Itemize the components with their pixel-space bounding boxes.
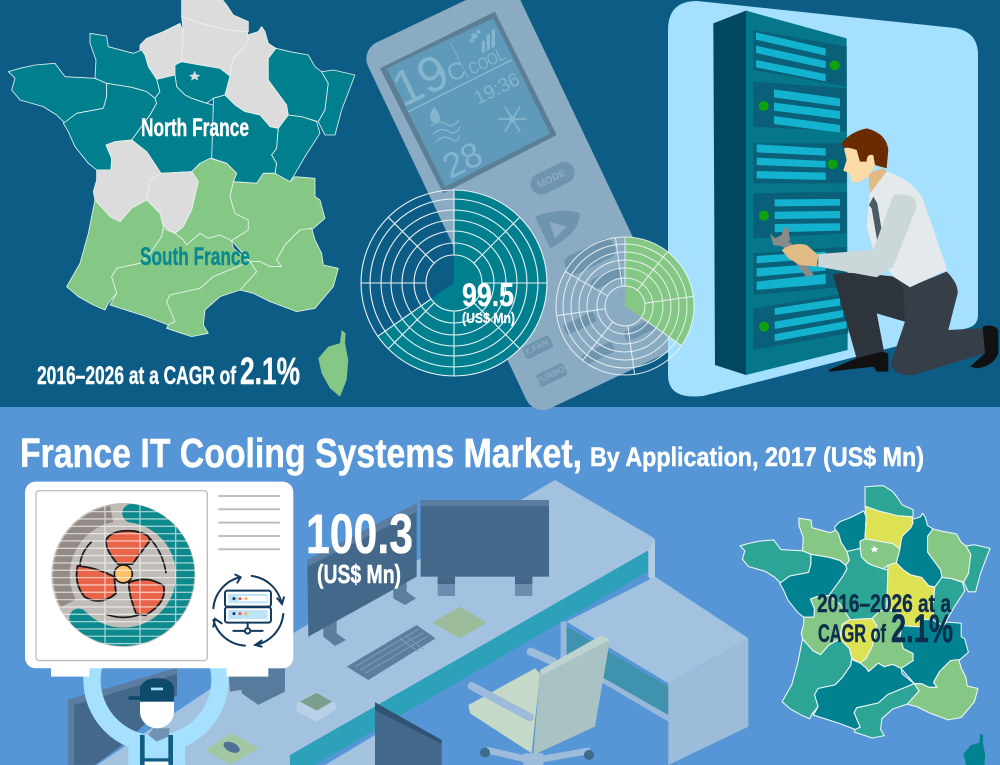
text: CAGR top: 2016–2026 at a CAGR of xyxy=(37,362,236,390)
map: France regional map xyxy=(740,486,990,765)
value: 99.5: 99.5 xyxy=(462,277,514,313)
map: France north and south regions xyxy=(8,0,355,397)
illustration: air conditioner remote control: COOL xyxy=(465,45,508,79)
illustration: air conditioner remote control: MODE xyxy=(536,168,568,191)
text: CAGR bottom: 2016–2026 at a xyxy=(817,590,952,618)
illustration: air conditioner remote control: 19:36 xyxy=(471,69,524,109)
value: 99.5: (US$ Mn) xyxy=(462,310,515,327)
panel: bottom blue background xyxy=(0,407,1000,765)
chart: large polar chart 99.5 xyxy=(361,190,547,376)
illustration: air conditioner remote control: °C xyxy=(434,56,470,92)
small box xyxy=(297,692,336,722)
title: By Application, 2017 (US$ Mn) xyxy=(590,442,924,472)
panel: light blue server background xyxy=(668,1,978,397)
illustration: air conditioner remote control: TURBO xyxy=(534,364,567,386)
illustration: air conditioner remote control xyxy=(360,0,684,416)
panel: top dark blue background xyxy=(0,0,1000,407)
title: France IT Cooling Systems Market, xyxy=(20,430,582,476)
vent lines xyxy=(218,496,280,549)
laptop xyxy=(375,702,442,765)
monitor: angled xyxy=(307,503,417,646)
illustration: left workstation and mousepad xyxy=(68,668,285,765)
icon: server with circular arrows xyxy=(213,575,284,647)
icon: fan xyxy=(50,500,197,650)
office chair xyxy=(468,635,610,765)
keyboard xyxy=(347,625,436,680)
text: CAGR bottom xyxy=(817,590,953,651)
chart: small polar chart xyxy=(556,237,694,375)
illustration: worker holding unit xyxy=(92,616,220,765)
value: 100.3 xyxy=(306,502,413,589)
label: North France: North France xyxy=(141,114,249,142)
value: 100.3: 100.3 xyxy=(306,502,413,565)
monitor: front xyxy=(421,500,549,596)
illustration: air conditioner remote control: 28 xyxy=(437,134,489,186)
illustration: air conditioner remote control: 19 xyxy=(383,43,457,118)
illustration: outdoor AC unit xyxy=(25,482,293,677)
sticky note xyxy=(432,607,487,638)
text: CAGR top xyxy=(37,351,300,393)
value: 99.5 xyxy=(462,277,515,327)
illustration: server rack xyxy=(713,11,848,375)
text: CAGR bottom: CAGR of xyxy=(818,620,886,648)
illustration: technician with wrench xyxy=(770,128,998,375)
text: CAGR top: 2.1% xyxy=(240,351,300,393)
text: CAGR bottom: 2.1% xyxy=(891,607,953,651)
value: 100.3: (US$ Mn) xyxy=(317,559,401,589)
illustration: air conditioner remote control: X.FAN xyxy=(523,337,550,357)
label: South France: South France xyxy=(140,243,250,271)
illustration: office desk xyxy=(97,480,748,765)
